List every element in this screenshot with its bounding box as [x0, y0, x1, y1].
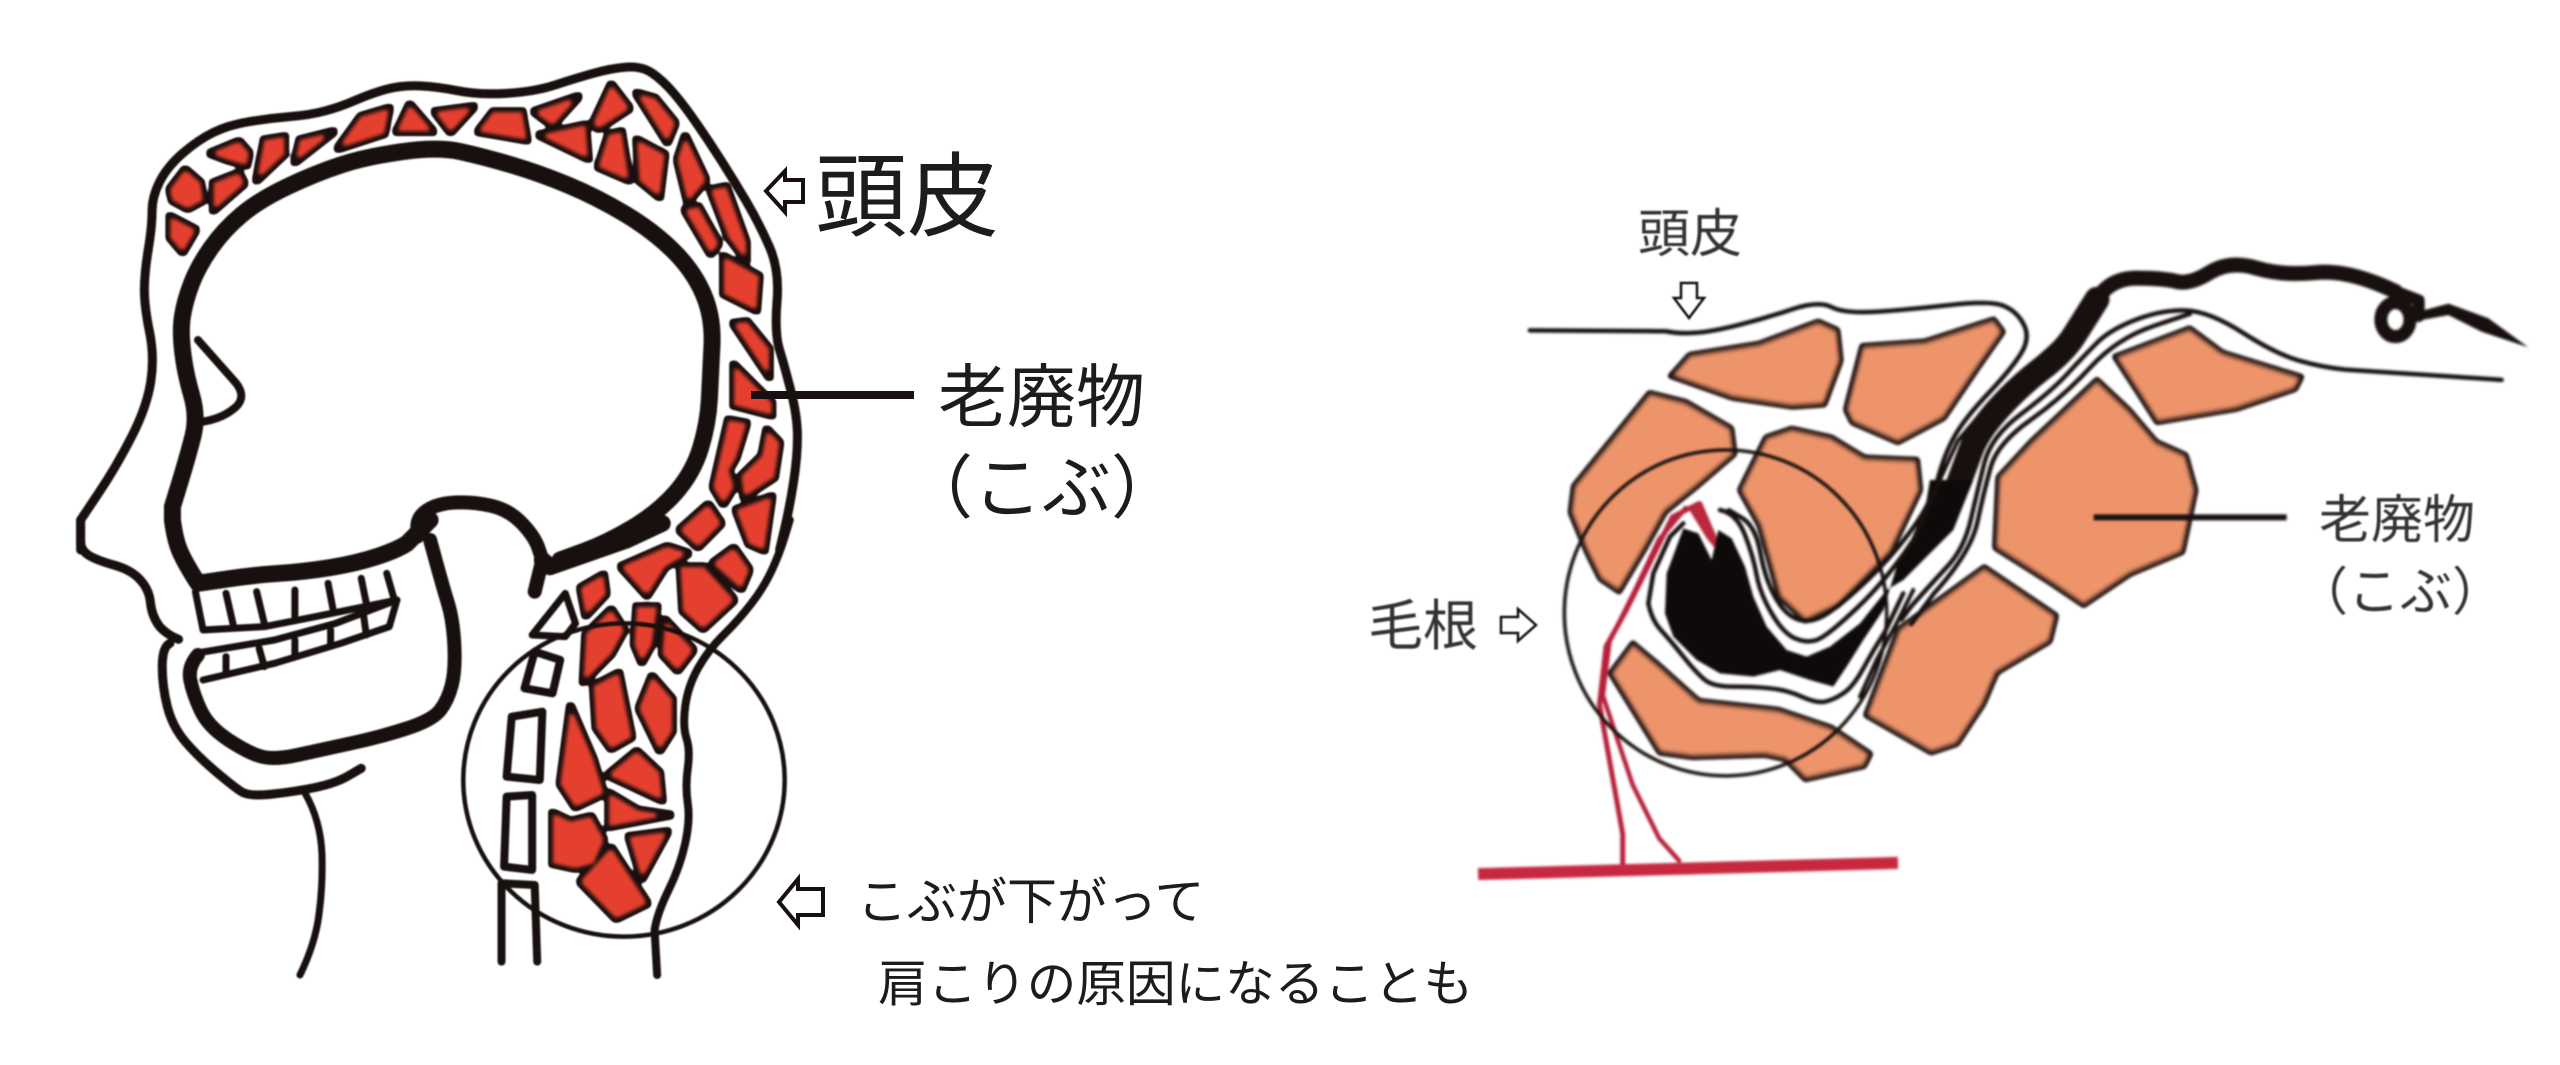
circle: follicle highlight: [1564, 450, 1887, 776]
neck front: [300, 793, 322, 975]
sheath left of bulb: [1648, 523, 1683, 603]
note: neck line 1: こぶが下がって: [857, 874, 1204, 930]
panel: head side view: [81, 67, 797, 975]
note: neck line 2: 肩こりの原因になることも: [878, 956, 1473, 1012]
sheath right of bulb: [1720, 480, 1940, 641]
skull base arch: [417, 502, 542, 560]
upper head drawing: [81, 67, 797, 560]
upper skull jaw edge: [172, 520, 430, 583]
circle: neck highlight: [463, 623, 785, 937]
blood vessel horizontal: [1478, 863, 1898, 874]
label: waste right: 老廃物: [2319, 492, 2475, 550]
follicle drawing: [1478, 265, 2528, 874]
label: nodule left: （こぶ）: [904, 450, 1180, 527]
blood vessel outer: [1599, 504, 1699, 870]
mandible: [190, 540, 455, 758]
heading: scalp: 頭皮: [815, 147, 999, 249]
scalp and forehead outline: [81, 67, 797, 550]
skin surface left: [1530, 303, 2027, 621]
skull back edge: [542, 523, 662, 567]
label: nodule right: （こぶ）: [2296, 564, 2504, 622]
arrow: scalp label: [766, 171, 803, 212]
chin and jaw outline: [162, 643, 361, 795]
arrow: scalp right: [1674, 283, 1704, 318]
upper teeth: [195, 573, 397, 630]
neck waste nodules: [553, 547, 749, 918]
hair bulb detail: [1648, 480, 1973, 702]
label: hair root: 毛根: [1368, 595, 1478, 657]
hair squiggle: [2097, 265, 2395, 299]
sheath left of hair: [1940, 300, 2097, 480]
hair bulb: [1665, 480, 1973, 687]
arrow: hair root: [1501, 609, 1536, 641]
hair loop: [2381, 303, 2410, 337]
hair root tip: [1688, 502, 1717, 548]
lower teeth: [195, 600, 397, 680]
cervical vertebrae: [502, 593, 576, 962]
skull: [172, 149, 712, 560]
leader line: waste right: [2094, 514, 2287, 520]
sheath second right: [1860, 590, 1913, 697]
waste nodules: [1570, 318, 2303, 780]
blood vessel inner: [1603, 508, 1686, 861]
skull base edge: [535, 560, 542, 592]
hair shaft: [1958, 299, 2097, 486]
hair tip: [2419, 304, 2528, 347]
eye socket: [198, 340, 241, 422]
arrow: neck note: [779, 879, 823, 925]
scalp waste nodules: [170, 85, 780, 550]
leader line: waste left: [751, 391, 914, 399]
right panel labels: [1368, 206, 2504, 657]
skin surface right: [1901, 310, 2502, 620]
label: waste left: 老廃物: [938, 359, 1145, 436]
panel: follicle cross section: [1478, 265, 2528, 874]
label: scalp right: 頭皮: [1638, 206, 1742, 264]
hair loop connector: [2395, 292, 2419, 316]
lower head drawing: [81, 520, 790, 975]
nose and lip outline: [81, 520, 179, 639]
sheath below bulb: [1648, 593, 1903, 702]
follicle inner sheath: [1911, 314, 2190, 624]
back of neck outline: [655, 520, 790, 975]
